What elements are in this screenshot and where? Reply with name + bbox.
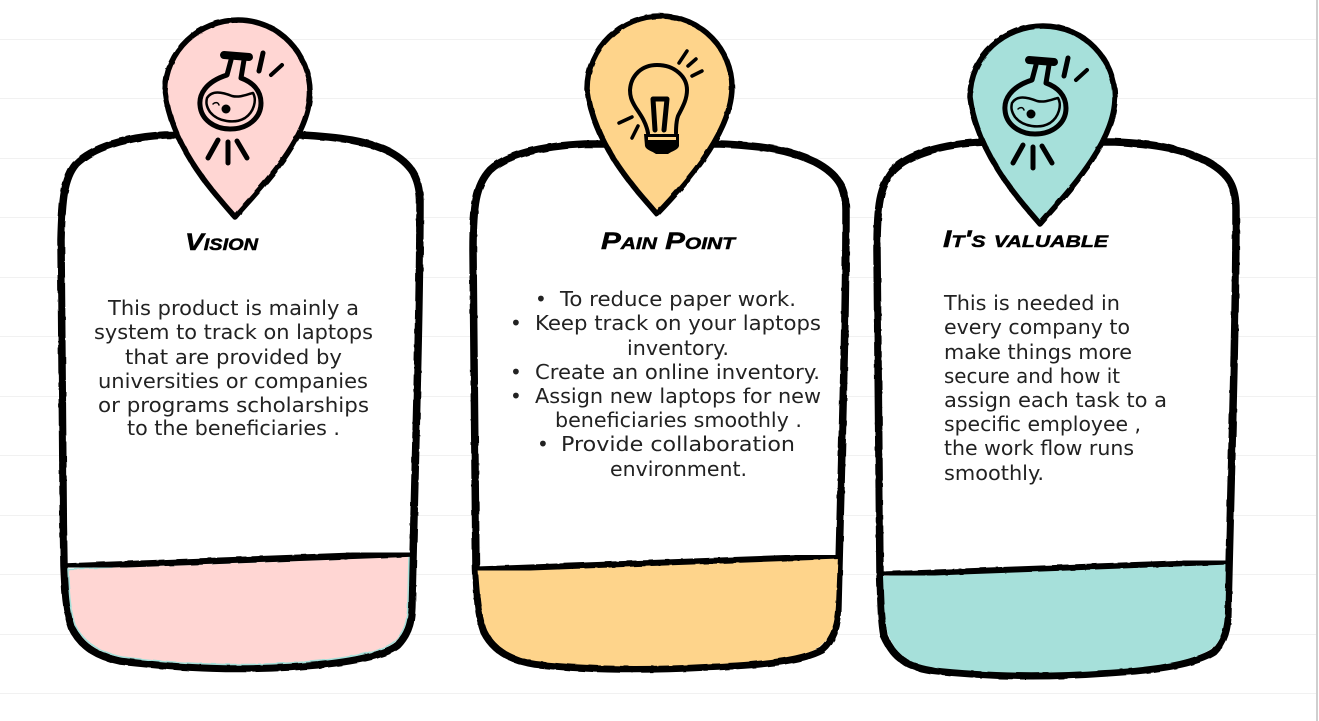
text: pain point: environment.: [610, 457, 747, 481]
text: it's valuable: secure and how it: [944, 364, 1120, 388]
footer band: it's valuable: [883, 563, 1226, 673]
panel: pain point: [473, 16, 846, 669]
pin: pain point: [587, 16, 732, 214]
footer band: pain point: [478, 556, 838, 666]
text: it's valuable: assign each task to a: [944, 388, 1167, 412]
panel: vision: [61, 20, 420, 669]
text: it's valuable: smoothly.: [944, 461, 1044, 485]
text: pain point: Provide collaboration: [561, 432, 795, 456]
card outline: vision: [61, 135, 420, 669]
text: it's valuable: specific employee ,: [944, 412, 1141, 436]
pin: it's valuable: [970, 26, 1115, 224]
text: it's valuable: make things more: [944, 340, 1132, 364]
text: pain point: [510, 287, 821, 481]
text: vision: that are provided by: [125, 345, 342, 369]
footer band: vision: [68, 556, 409, 665]
text: pain point: beneficiaries smoothly .: [555, 408, 802, 432]
icon: light bulb: [619, 51, 702, 154]
text: pain point: •: [510, 311, 522, 335]
divider: it's valuable: [881, 562, 1230, 574]
card outline: it's valuable: [877, 142, 1236, 676]
text: vision: universities or companies: [98, 369, 368, 393]
text: pain point: •: [510, 384, 522, 408]
card outline: pain point: [473, 144, 846, 669]
text: vision: system to track on laptops: [94, 320, 373, 344]
icon: flask: [200, 53, 282, 163]
text: it's valuable: [943, 291, 1167, 485]
panel: it's valuable: [877, 26, 1236, 676]
text: vision: This product is mainly a: [107, 296, 359, 320]
text: vision: [94, 296, 373, 440]
text: it's valuable: This is needed in: [943, 291, 1120, 315]
text: pain point: Assign new laptops for new: [535, 384, 821, 408]
divider: vision: [66, 554, 412, 566]
text: pain point: Create an online inventory.: [535, 360, 820, 384]
text: pain point: inventory.: [627, 336, 729, 360]
text: pain point: To reduce paper work.: [559, 287, 796, 311]
heading: it's valuable: It's valuable: [943, 226, 1109, 253]
text: vision: or programs scholarships: [98, 393, 369, 417]
text: pain point: •: [510, 360, 522, 384]
heading: vision: Vision: [185, 229, 259, 256]
pin: vision: [165, 20, 310, 217]
divider: pain point: [476, 556, 840, 570]
heading: pain point: Pain Point: [601, 228, 737, 255]
text: pain point: Keep track on your laptops: [535, 311, 821, 335]
text: pain point: •: [537, 432, 549, 456]
text: it's valuable: the work flow runs: [944, 436, 1134, 460]
text: vision: to the beneficiaries .: [127, 416, 340, 440]
text: pain point: •: [535, 287, 547, 311]
text: it's valuable: every company to: [944, 315, 1130, 339]
icon: flask: [1005, 58, 1087, 168]
